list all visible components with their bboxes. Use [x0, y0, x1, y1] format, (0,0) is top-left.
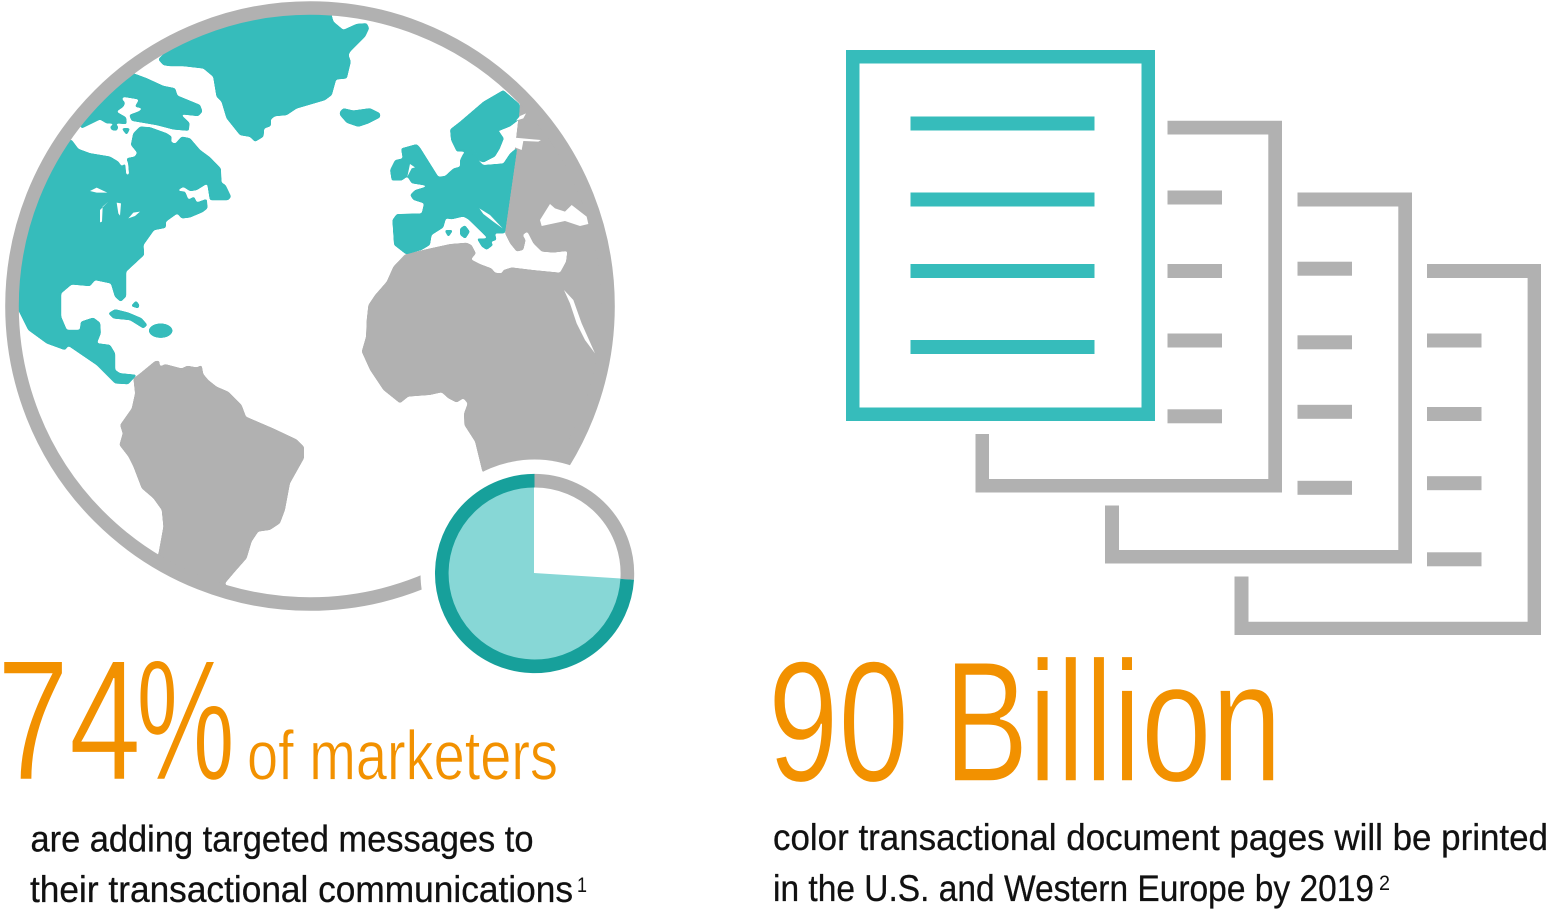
globe ring: [12, 8, 608, 604]
stat heading: 74% of marketers: [0, 624, 558, 816]
stat heading: 74% of marketers: %: [136, 624, 235, 816]
land: North America and Greenland (teal): [0, 0, 380, 384]
right description text: 2: [1379, 872, 1390, 895]
Great Lakes: [90, 188, 140, 222]
right description text: [773, 817, 1547, 909]
left description text: 1: [577, 874, 587, 897]
pie chart: 74 percent: [420, 460, 648, 688]
land: Western Europe (teal): [390, 90, 520, 254]
right description text: in the U.S. and Western Europe by 2019: [773, 868, 1374, 909]
left description text: [30, 818, 587, 910]
pie ring 74 percent: [442, 481, 627, 666]
stat heading: 74% of marketers: of marketers: [247, 716, 558, 794]
gray document 2: [1105, 192, 1412, 564]
pie ring remainder: [534, 481, 627, 579]
globe illustration: [0, 0, 653, 617]
gray document 1: [976, 121, 1282, 492]
land: South America (gray): [120, 360, 304, 585]
teal document: [846, 50, 1155, 421]
stat heading: 74% of marketers: 74: [0, 624, 141, 816]
gray document 3: [1234, 264, 1541, 635]
stat heading: 90 Billion: 90 Billion: [768, 626, 1282, 818]
land: Eurasia and Africa (gray): [362, 104, 602, 472]
left description text: are adding targeted messages to: [30, 818, 534, 860]
pie wedge: [447, 486, 621, 660]
inland seas: [407, 113, 595, 353]
left description text: their transactional communications: [30, 869, 573, 910]
